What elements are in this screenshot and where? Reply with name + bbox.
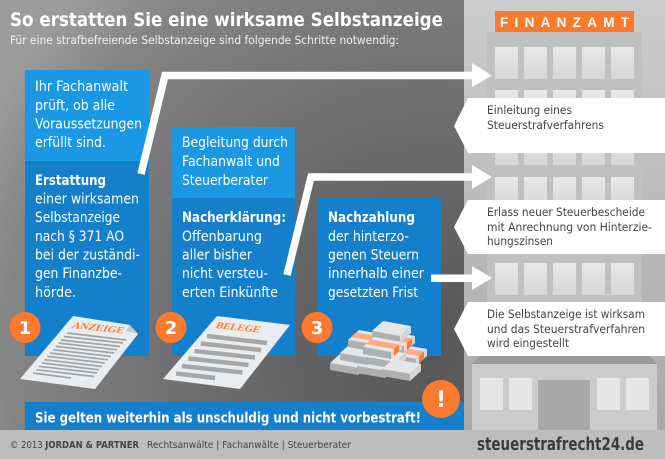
panel: step 2: aller bisher	[182, 248, 252, 264]
number badge 1	[10, 312, 40, 343]
title: So erstatten Sie eine wirksame Selbstanzeige	[10, 9, 443, 31]
icon: Belege document: BELEGE	[214, 321, 263, 335]
callout: Erlass: hungszinsen	[487, 234, 553, 248]
icon: exclamation badge	[422, 380, 460, 418]
panel: step 1: Selbstanzeige	[35, 210, 120, 226]
panel: step 1: bei der zuständi-	[35, 248, 140, 264]
footer: Rechtsanwälte | Fachanwälte | Steuerberater	[147, 440, 352, 451]
panel: step 3: genen Steuern	[328, 248, 419, 264]
number badge 2: 2	[165, 318, 177, 339]
banner: bottom message: Sie gelten weiterhin als unschuldig und nicht vorbestraft!	[35, 410, 421, 426]
label: Finanzamt	[495, 11, 634, 32]
panel: step 2: Fachanwalt und	[182, 154, 280, 170]
subtitle: Für eine strafbefreiende Selbstanzeige sind folgende Schritte notwendig:	[10, 33, 399, 47]
panel: step 3: der hinterzo-	[328, 229, 409, 245]
arrow: step 3 to building	[431, 266, 492, 290]
panel: step 1: Voraussetzungen	[35, 116, 142, 132]
icon: Anzeige document	[20, 316, 138, 389]
panel: step 2: Nacherklärung:	[182, 210, 286, 226]
callout: wirksam: wird eingestellt	[487, 336, 569, 350]
icon: exclamation badge: !	[436, 388, 446, 413]
callout: Einleitung	[454, 98, 665, 153]
icon: stack of silver bars	[330, 321, 427, 381]
number badge 3: 3	[311, 318, 323, 339]
callout: Einleitung: Steuerstrafverfahrens	[487, 118, 604, 132]
panel: step 2: Offenbarung	[182, 229, 262, 245]
panel: step 1: nach § 371 AO	[35, 229, 124, 245]
panel: step 3: Nachzahlung	[328, 210, 415, 226]
icon: Anzeige document: ANZEIGE	[70, 321, 127, 336]
panel: step 1: Ihr Fachanwalt	[35, 79, 128, 95]
number badge 3	[302, 312, 332, 343]
panel: step 1: Erstattung	[35, 173, 106, 189]
banner: bottom message	[25, 402, 464, 430]
panel: step 2: Steuerberater	[182, 173, 268, 189]
callout: Erlass: mit Anrechnung von Hinterzie-	[487, 220, 652, 234]
panel: step 2: Begleitung durch	[182, 135, 288, 151]
arrow: step 2 to building	[287, 165, 492, 275]
label: Finanzamt: FINANZAMT	[500, 15, 630, 30]
background	[0, 0, 464, 430]
panel: step 1: einer wirksamen	[35, 192, 139, 208]
panel: step 1: erfüllt sind.	[35, 135, 106, 151]
panel: step 1: gen Finanzbe-	[35, 266, 122, 282]
panel: step 3: innerhalb einer	[328, 266, 424, 282]
panel: step 3	[318, 198, 441, 356]
building: tax office	[464, 0, 665, 430]
callout: wirksam: und das Steuerstrafverfahren	[487, 322, 645, 336]
icon: Belege document	[163, 316, 290, 389]
panel: step 1	[25, 70, 149, 356]
arrow: step 1 to building	[141, 63, 492, 174]
panel: step 2	[172, 127, 295, 356]
callout: Erlass: Erlass neuer Steuerbescheide	[487, 205, 645, 219]
footer	[0, 430, 665, 459]
panel: step 3: gesetzten Frist	[328, 285, 418, 301]
panel: step 2: erten Einkünfte	[182, 285, 278, 301]
panel: step 1: prüft, ob alle	[35, 98, 115, 114]
callout: wirksam: Die Selbstanzeige ist wirksam	[487, 307, 645, 321]
callout: Erlass	[454, 200, 665, 254]
panel: step 2: nicht versteu-	[182, 266, 268, 282]
footer: © 2013 JORDAN & PARTNER	[10, 440, 139, 451]
number badge 2	[156, 312, 186, 343]
number badge 1: 1	[19, 318, 31, 339]
callout: Einleitung: Einleitung eines	[487, 103, 572, 117]
panel: step 1: hörde.	[35, 285, 76, 301]
callout: wirksam	[454, 302, 665, 356]
